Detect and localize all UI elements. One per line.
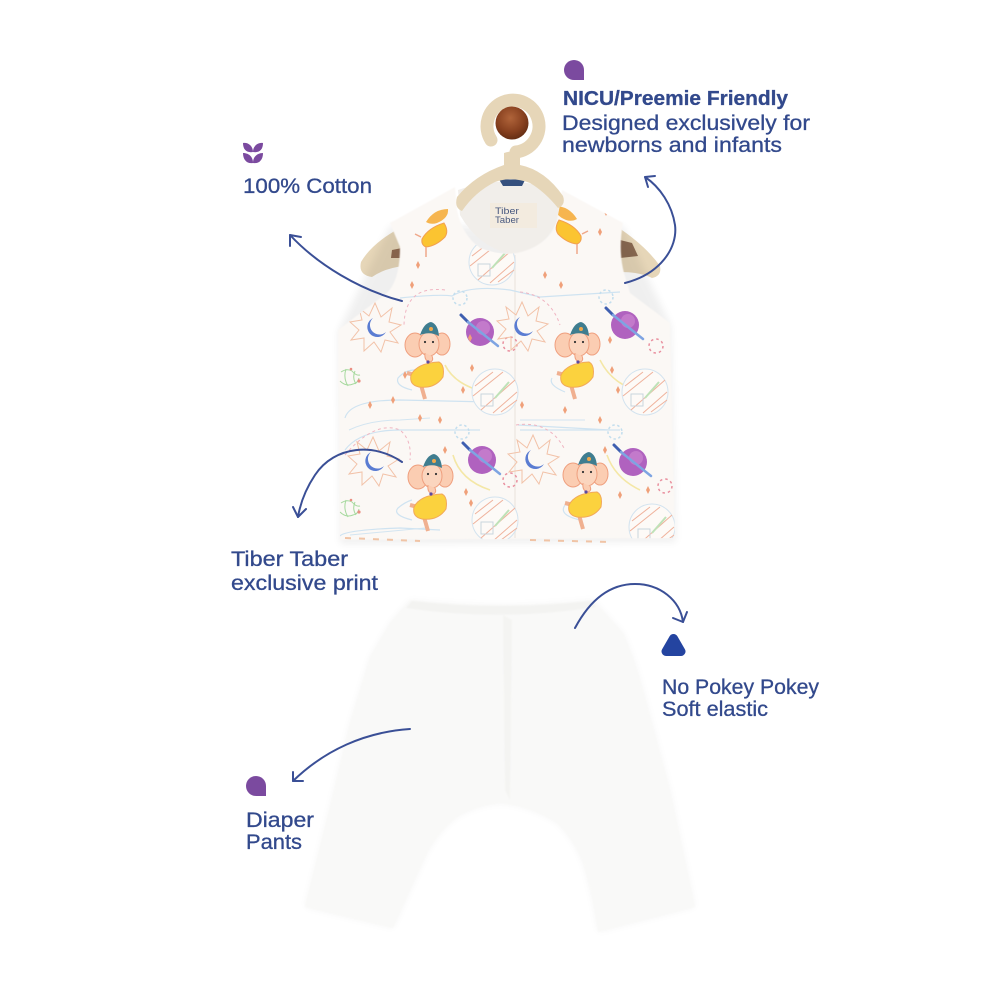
hanger tips behind shirt xyxy=(360,226,660,278)
label: Pants xyxy=(246,831,302,854)
neck label: Taber xyxy=(495,215,519,225)
icon: purple drop xyxy=(564,60,584,80)
hanger front with hook xyxy=(456,100,564,211)
callout: NICU/Preemie friendly xyxy=(562,60,810,157)
callout: exclusive print: Tiber Taber xyxy=(231,548,348,571)
callout: exclusive print: exclusive print xyxy=(231,572,378,595)
print motif: ducks xyxy=(415,206,588,257)
label: No Pokey Pokey xyxy=(662,676,819,699)
callout: exclusive print xyxy=(231,548,378,595)
pants product photo xyxy=(305,600,695,932)
description: newborns and infants xyxy=(562,134,782,157)
label: 100% Cotton xyxy=(243,175,372,198)
shirt body xyxy=(338,176,676,550)
print motif: planets xyxy=(461,308,651,476)
shirt and hanger product photo xyxy=(338,100,676,550)
callout: 100% cotton xyxy=(243,143,372,198)
print motif: green sprigs xyxy=(340,368,361,517)
description: Designed exclusively for xyxy=(562,112,810,135)
arrow: cotton xyxy=(290,235,402,301)
icon: purple drop xyxy=(246,776,266,796)
hanger knob xyxy=(496,106,528,140)
arrow: soft elastic xyxy=(575,584,687,628)
callout: diaper pants xyxy=(246,776,314,854)
print motif: ganesh xyxy=(405,322,608,531)
callout: no pokey xyxy=(662,638,819,721)
neck label: Tiber xyxy=(495,206,519,216)
label: Diaper xyxy=(246,809,314,832)
label xyxy=(246,809,314,854)
icon: purple leaves xyxy=(243,143,263,163)
label: Soft elastic xyxy=(662,698,768,721)
label xyxy=(662,676,819,721)
description xyxy=(562,112,810,157)
shirt print xyxy=(340,206,675,550)
icon: blue rounded triangle xyxy=(666,638,681,652)
arrow: NICU xyxy=(625,176,675,283)
print motif: striped circles xyxy=(469,239,675,550)
print motif: suns xyxy=(348,302,559,486)
arrow: diaper pants xyxy=(293,729,410,781)
heading: NICU/Preemie Friendly xyxy=(563,88,789,110)
arrow: exclusive print xyxy=(293,450,402,517)
neck label xyxy=(490,203,537,228)
